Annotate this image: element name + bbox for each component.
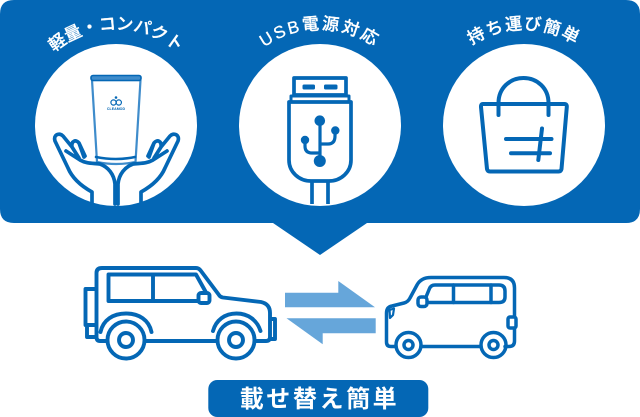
- label: easy to swap: [208, 380, 428, 417]
- label: easy to swap: 載せ替え簡単: [240, 386, 399, 413]
- feature: easy to carry: [443, 15, 605, 206]
- circle: USB background: [239, 44, 401, 206]
- panel: features background with pointer: [0, 0, 640, 255]
- feature: lightweight and compact: [35, 16, 197, 206]
- circle: bag background: [443, 44, 605, 206]
- heading: USB powered: USB電源対応: [258, 15, 380, 46]
- icon: device held in hands: CLEAMOD: [107, 107, 125, 111]
- circle: lightweight background: [35, 44, 197, 206]
- icon: large SUV: [86, 268, 275, 358]
- arrow: swap to right: [285, 281, 375, 307]
- icon: device held in hands: [55, 76, 178, 204]
- icon: small van: [386, 278, 516, 358]
- heading: easy to carry: 持ち運び簡単: [466, 15, 580, 46]
- icon: USB plug: [289, 78, 351, 204]
- arrow: swap to left: [286, 318, 376, 344]
- icon: shopping bag: [481, 78, 567, 172]
- heading: lightweight and compact: 軽量・コンパクト: [47, 16, 180, 52]
- feature: USB powered: [239, 15, 401, 206]
